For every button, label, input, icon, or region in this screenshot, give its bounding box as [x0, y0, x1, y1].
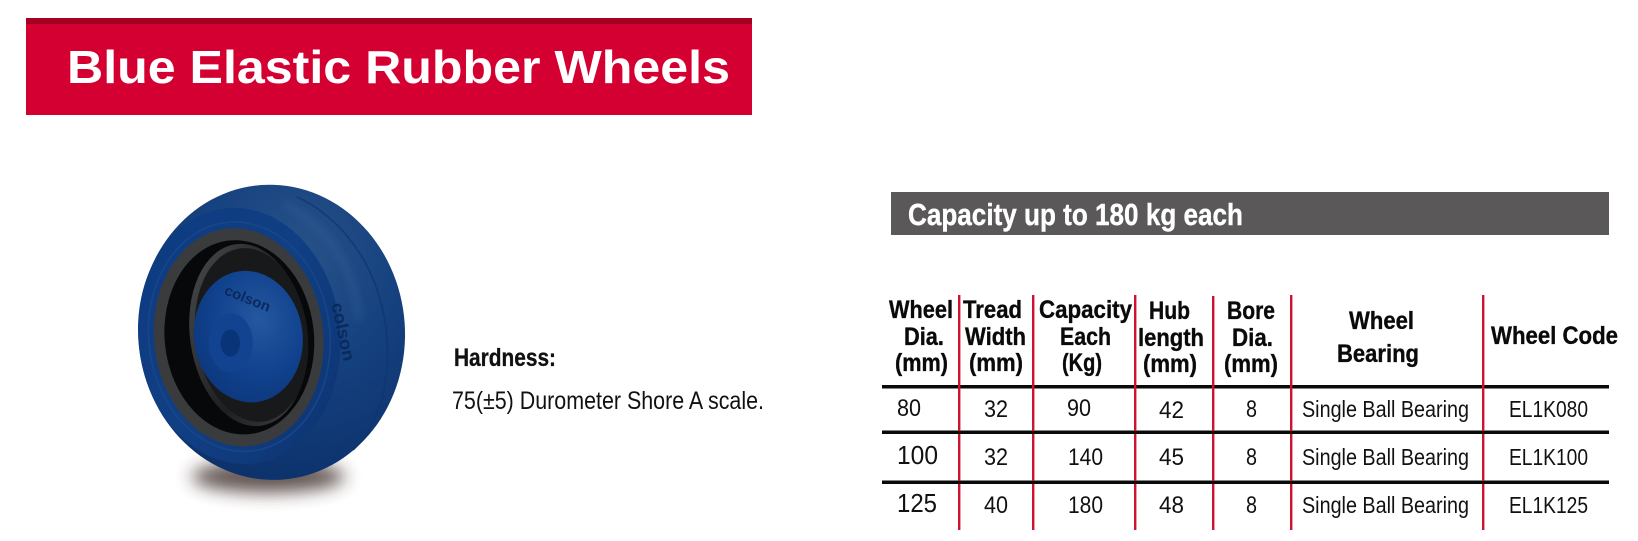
- capacity text: Capacity up to 180 kg each: [908, 197, 1243, 232]
- centre disc: [178, 236, 319, 434]
- table header: Bore: [1227, 297, 1275, 325]
- table header: [889, 296, 1618, 378]
- row 80 mm: 80: [897, 395, 921, 422]
- row 125 mm: 8: [1246, 492, 1257, 519]
- table header: Tread: [963, 296, 1022, 324]
- row 80 mm: EL1K080: [1509, 396, 1588, 422]
- row 125 mm: Single Ball Bearing: [1302, 492, 1469, 518]
- table header: (mm): [895, 349, 948, 377]
- hardness note: [452, 344, 764, 415]
- hub: [185, 264, 311, 410]
- row 125 mm: EL1K125: [1509, 492, 1588, 518]
- row 80 mm: 42: [1159, 397, 1184, 424]
- row 100 mm: EL1K100: [1509, 444, 1588, 470]
- table header: Wheel: [1349, 307, 1414, 335]
- hardness heading: Hardness:: [454, 344, 556, 372]
- row 80 mm: Single Ball Bearing: [1302, 396, 1469, 422]
- table header: (mm): [969, 349, 1023, 377]
- row 80 mm: 8: [1246, 396, 1257, 423]
- table header: length: [1138, 324, 1204, 352]
- table header: Width: [965, 323, 1026, 351]
- row 100 mm: [897, 440, 1588, 471]
- row 125 mm: 125: [897, 488, 937, 518]
- row 100 mm: 140: [1068, 444, 1103, 471]
- rim inner: [155, 233, 324, 442]
- table header: Dia.: [1232, 324, 1273, 352]
- specification table: [882, 295, 1618, 530]
- tyre front face: [125, 198, 353, 474]
- wheel shadow: [192, 461, 345, 493]
- row 125 mm: 48: [1159, 492, 1184, 519]
- row 125 mm: 40: [984, 492, 1008, 519]
- row 125 mm: 180: [1068, 492, 1103, 519]
- capacity bar: [891, 192, 1609, 235]
- table header: Each: [1060, 323, 1111, 351]
- tyre: [128, 176, 415, 489]
- title banner: [26, 18, 752, 115]
- table header: (Kg): [1062, 349, 1102, 377]
- bore hole: [221, 329, 240, 357]
- row 100 mm: 45: [1159, 444, 1184, 471]
- row 100 mm: Single Ball Bearing: [1302, 444, 1469, 470]
- table header: Capacity: [1039, 296, 1132, 324]
- title text: Blue Elastic Rubber Wheels: [67, 41, 730, 93]
- table header: Dia.: [904, 323, 944, 351]
- table header: Wheel Code: [1491, 322, 1618, 350]
- table header: Wheel: [889, 296, 953, 324]
- row 80 mm: 32: [984, 396, 1008, 423]
- rim: [143, 220, 334, 455]
- table header: Hub: [1149, 297, 1190, 325]
- boss: [209, 313, 253, 372]
- hub lettering: colson: [222, 283, 273, 316]
- row 100 mm: 100: [897, 440, 938, 470]
- row 80 mm: [897, 395, 1588, 424]
- row 125 mm: [897, 488, 1588, 519]
- hardness value: 75(±5) Durometer Shore A scale.: [452, 387, 764, 415]
- tyre lettering: colson: [327, 301, 359, 363]
- table header: (mm): [1143, 350, 1197, 378]
- row 100 mm: 8: [1246, 444, 1257, 471]
- table header: (mm): [1224, 350, 1278, 378]
- row 100 mm: 32: [984, 444, 1008, 471]
- table rules: [882, 295, 1609, 530]
- table header: Bearing: [1337, 340, 1419, 368]
- wheel photo: [125, 176, 415, 493]
- row 80 mm: 90: [1067, 395, 1091, 422]
